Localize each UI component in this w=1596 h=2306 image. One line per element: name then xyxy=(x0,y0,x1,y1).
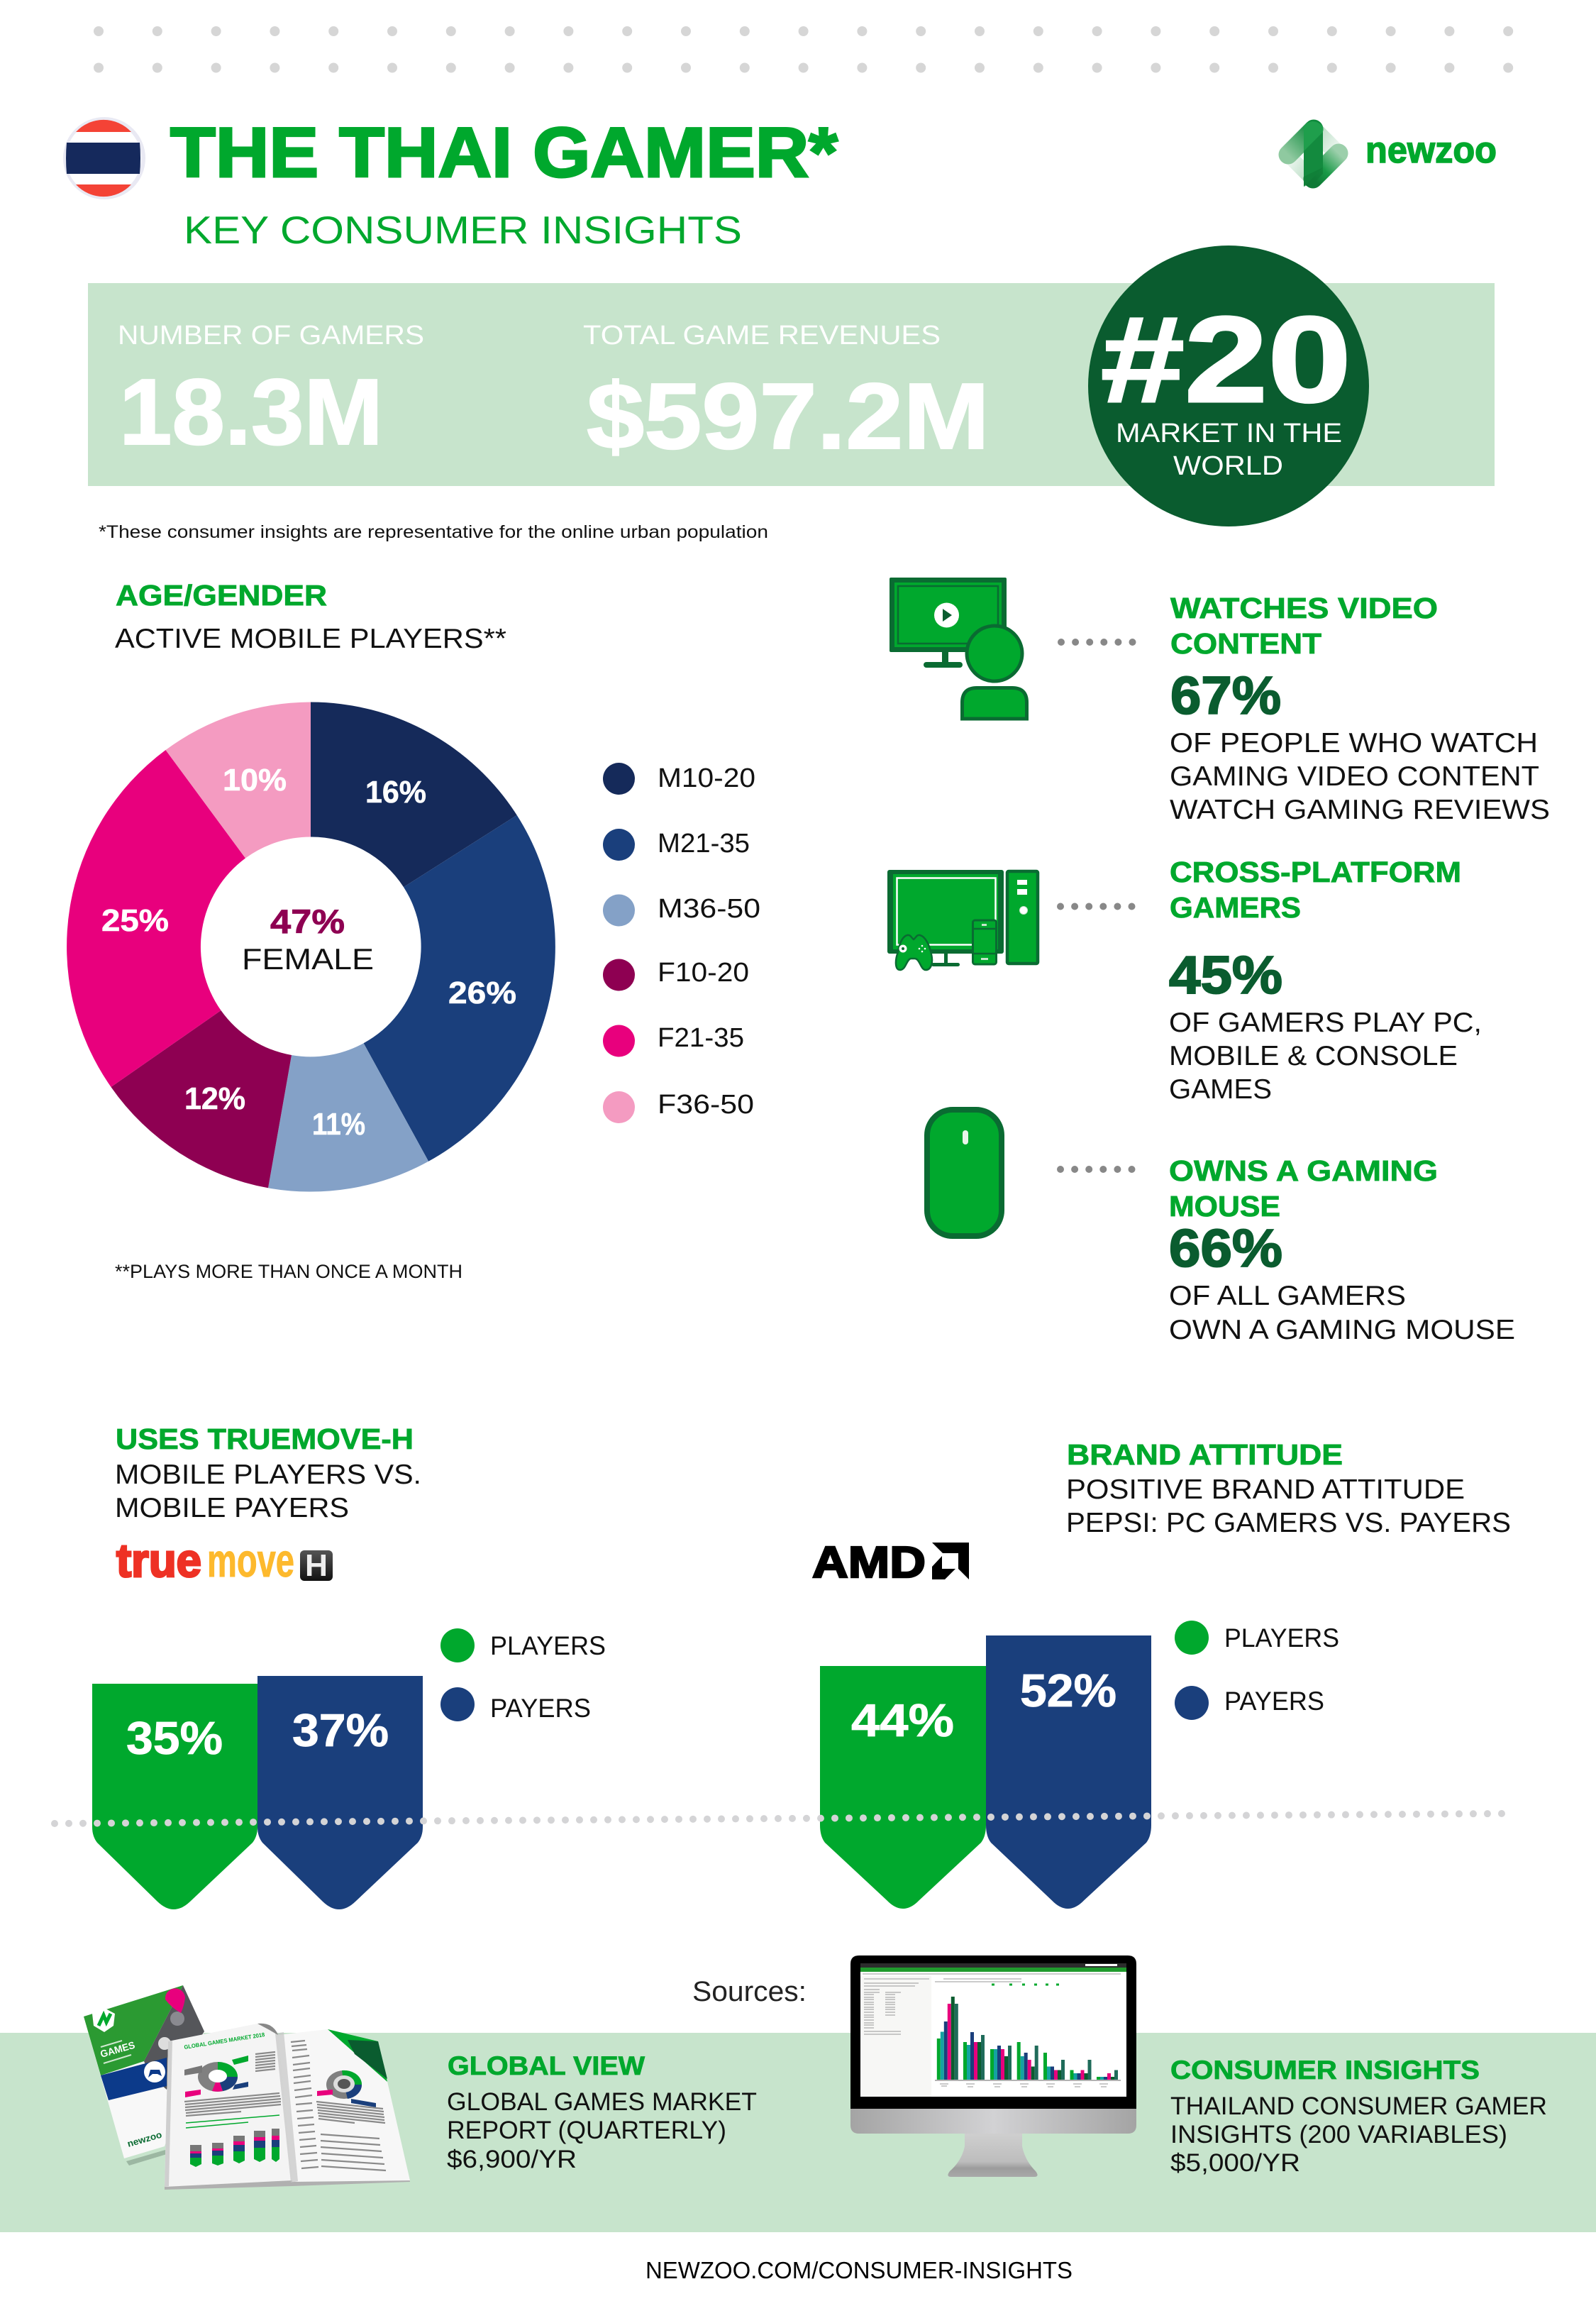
text block: global view: REPORT (QUARTERLY) xyxy=(447,2117,726,2144)
text block: watches video content: OF PEOPLE WHO WATCH xyxy=(1170,728,1538,758)
stat: number of gamers: 18.3M xyxy=(119,360,383,464)
text block: consumer insights: $5,000/YR xyxy=(1170,2149,1300,2177)
stat: number of gamers xyxy=(118,321,424,464)
text block: consumer insights: THAILAND CONSUMER GAMER xyxy=(1170,2092,1547,2120)
footnote: plays more than once a month: **PLAYS MORE THAN ONCE A MONTH xyxy=(115,1261,462,1282)
text block: owns a gaming mouse: MOUSE xyxy=(1169,1190,1280,1223)
icon: person watching video on monitor xyxy=(890,578,1027,719)
donut chart: age and gender xyxy=(67,702,555,1192)
text block: owns a gaming mouse: 66% xyxy=(1169,1218,1282,1278)
panel: headline stats band xyxy=(88,283,1495,486)
footer: website: NEWZOO.COM/CONSUMER-INSIGHTS xyxy=(645,2257,1073,2283)
subtitle: KEY CONSUMER INSIGHTS xyxy=(184,208,742,252)
monitor chin xyxy=(850,2109,1136,2134)
label: 10%: 10% xyxy=(223,763,287,798)
text block: consumer insights: CONSUMER INSIGHTS xyxy=(1170,2056,1480,2085)
connector dots: cross-platform xyxy=(1060,903,1134,910)
arrow bar: players 35% xyxy=(92,1684,257,1909)
legend: age and gender: M21-35 xyxy=(658,829,750,859)
heading: brand attitude xyxy=(1066,1438,1511,1538)
text block: global view: $6,900/YR xyxy=(447,2146,577,2173)
chart: AMD players vs payers xyxy=(820,1635,1151,1909)
logo: newzoo xyxy=(1285,121,1497,187)
logo: truemove H: true xyxy=(116,1534,201,1587)
text block: cross-platform gamers: CROSS-PLATFORM xyxy=(1170,856,1461,888)
text block: cross-platform gamers: OF GAMERS PLAY PC, xyxy=(1169,1008,1482,1038)
text block: watches video content: 67% xyxy=(1170,666,1281,725)
logo: truemove H: H xyxy=(305,1548,328,1583)
monitor stand xyxy=(948,2134,1038,2177)
legend: age and gender: M36-50 xyxy=(658,894,760,924)
badge: #20 market in the world: #20 xyxy=(1101,292,1351,428)
logo: AMD xyxy=(812,1538,969,1587)
heading: uses truemove-h xyxy=(115,1423,421,1523)
legend: truemove: PLAYERS xyxy=(490,1631,606,1660)
legend: truemove: PAYERS xyxy=(490,1694,591,1723)
legend: age and gender: F21-35 xyxy=(658,1023,744,1053)
logo: newzoo: newzoo xyxy=(1365,130,1497,171)
text block: owns a gaming mouse: OWNS A GAMING xyxy=(1169,1154,1438,1187)
badge: #20 market in the world xyxy=(1088,246,1369,526)
title: THE THAI GAMER* xyxy=(170,113,838,192)
heading: age/gender: ACTIVE MOBILE PLAYERS** xyxy=(115,624,506,654)
legend: AMD: PLAYERS xyxy=(1224,1623,1339,1653)
text block: global view: GLOBAL GAMES MARKET xyxy=(447,2088,757,2116)
connector dots: video xyxy=(1061,639,1135,646)
logo: AMD: AMD xyxy=(812,1538,926,1587)
heading: brand attitude: PEPSI: PC GAMERS VS. PAYERS xyxy=(1066,1508,1511,1538)
stat: total game revenues xyxy=(583,321,990,468)
icon: PC, mobile and console xyxy=(887,870,1038,970)
dashboard screen xyxy=(860,1963,1126,2097)
legend: AMD: PAYERS xyxy=(1224,1687,1324,1716)
legend: age and gender: F10-20 xyxy=(658,958,749,988)
legend: age and gender: M10-20 xyxy=(658,763,755,793)
panel: sources band xyxy=(0,2033,1596,2232)
text block: cross-platform gamers: GAMERS xyxy=(1170,891,1301,924)
label: sources: Sources: xyxy=(692,1976,807,2007)
legend: truemove xyxy=(440,1628,606,1723)
text block: cross-platform gamers: 45% xyxy=(1169,945,1282,1005)
label: 26%: 26% xyxy=(448,976,516,1010)
logo: truemove H xyxy=(116,1534,333,1587)
image: desktop monitor with dashboard xyxy=(850,1955,1136,2177)
badge: #20 market in the world: MARKET IN THE xyxy=(1116,419,1342,448)
text block: owns a gaming mouse: OWN A GAMING MOUSE xyxy=(1169,1315,1515,1345)
heading: age/gender xyxy=(115,579,506,654)
legend: age and gender: F36-50 xyxy=(658,1090,754,1120)
text block: consumer insights: INSIGHTS (200 VARIABLES) xyxy=(1170,2121,1507,2148)
chart: truemove players vs payers xyxy=(92,1676,423,1909)
label: 16%: 16% xyxy=(365,775,426,810)
arrow bar: players 44% xyxy=(820,1666,986,1909)
text block: watches video content: GAMING VIDEO CONTENT xyxy=(1170,761,1539,792)
heading: uses truemove-h: MOBILE PLAYERS VS. xyxy=(115,1460,421,1490)
label: 11%: 11% xyxy=(312,1107,365,1142)
text: report page heading: GLOBAL GAMES MARKET 2018 xyxy=(184,2031,265,2051)
center label: 47% female: FEMALE xyxy=(242,942,374,976)
icon: Thai flag xyxy=(63,117,145,199)
stat: number of gamers: NUMBER OF GAMERS xyxy=(118,321,424,351)
image: open report xyxy=(165,2024,410,2190)
monitor bezel xyxy=(850,1955,1136,2109)
center label: 47% female: 47% xyxy=(270,903,345,940)
arrow bar: payers 37% xyxy=(257,1676,423,1909)
connector dots: mouse xyxy=(1060,1166,1134,1173)
text block: global view: GLOBAL VIEW xyxy=(448,2051,645,2080)
text block: owns a gaming mouse: OF ALL GAMERS xyxy=(1169,1281,1406,1311)
chart: report stacked bars xyxy=(190,2129,279,2167)
heading: brand attitude: POSITIVE BRAND ATTITUDE xyxy=(1066,1474,1465,1505)
text block: cross-platform gamers xyxy=(1169,856,1482,1105)
heading: uses truemove-h: USES TRUEMOVE-H xyxy=(116,1423,414,1455)
chart: report right donut xyxy=(317,2070,376,2107)
heading: age/gender: AGE/GENDER xyxy=(116,579,327,612)
text block: owns a gaming mouse xyxy=(1169,1154,1515,1345)
badge: #20 market in the world: WORLD xyxy=(1173,451,1283,481)
stat: total game revenues: $597.2M xyxy=(587,364,990,468)
arrow bar: payers 52% xyxy=(986,1635,1151,1909)
legend: age and gender xyxy=(603,763,760,1123)
logo: truemove H: move xyxy=(207,1534,294,1587)
heading: uses truemove-h: MOBILE PAYERS xyxy=(115,1493,349,1523)
text block: watches video content: WATCH GAMING REVIEWS xyxy=(1170,795,1550,825)
text block: watches video content xyxy=(1170,592,1550,825)
text block: global view xyxy=(447,2051,757,2173)
legend: AMD xyxy=(1175,1621,1339,1720)
footnote: representativeness: *These consumer insights are representative for the online urban population xyxy=(99,522,768,542)
label: 12%: 12% xyxy=(184,1081,245,1116)
bars: survey chart xyxy=(938,1997,1116,2080)
text block: watches video content: CONTENT xyxy=(1170,627,1321,660)
icon: gaming mouse xyxy=(927,1110,1002,1236)
text block: cross-platform gamers: MOBILE & CONSOLE xyxy=(1169,1041,1458,1071)
center label: 47% female xyxy=(242,903,374,976)
arrow bar: payers 37%: 37% xyxy=(292,1704,389,1756)
arrow bar: players 44%: 44% xyxy=(851,1694,954,1746)
text block: cross-platform gamers: GAMES xyxy=(1169,1074,1272,1105)
heading: brand attitude: BRAND ATTITUDE xyxy=(1067,1438,1343,1471)
arrow bar: payers 52%: 52% xyxy=(1020,1665,1116,1716)
label: 25%: 25% xyxy=(101,903,169,938)
stat: total game revenues: TOTAL GAME REVENUES xyxy=(583,321,941,351)
arrow bar: players 35%: 35% xyxy=(126,1712,223,1764)
text block: consumer insights xyxy=(1170,2056,1547,2177)
chart: report left donut xyxy=(184,2056,248,2097)
text: cover brand: newzoo xyxy=(126,2129,163,2149)
text block: watches video content: WATCHES VIDEO xyxy=(1170,592,1438,624)
image: report cover xyxy=(84,1985,204,2166)
text: cover title: GAMES xyxy=(99,2039,136,2060)
